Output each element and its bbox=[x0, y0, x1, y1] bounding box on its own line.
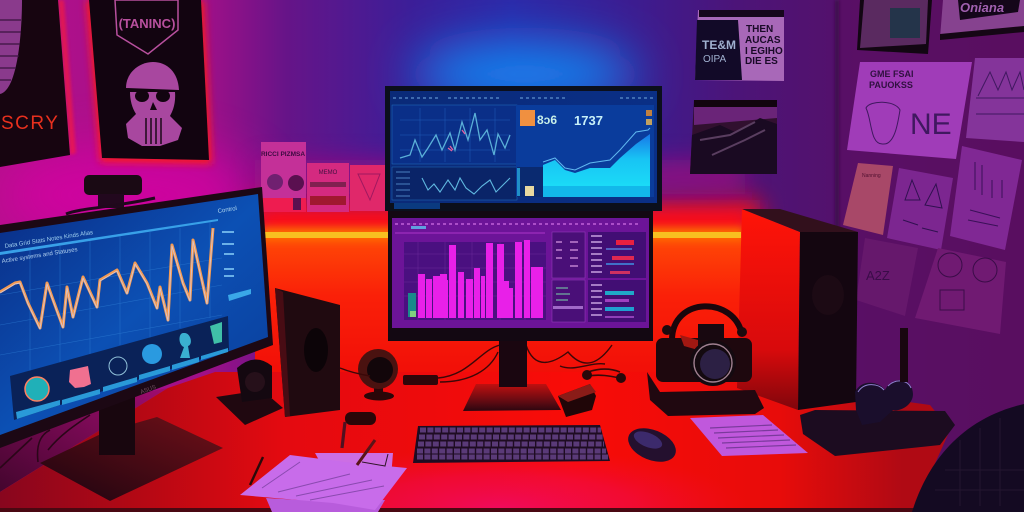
power brick bbox=[558, 384, 596, 417]
card: notes: MEMO bbox=[319, 170, 338, 176]
poster: team: OIPA bbox=[703, 54, 726, 65]
poster: team: I EGIHO bbox=[745, 46, 783, 57]
backlit wall below the light strip bbox=[255, 236, 745, 386]
sketch notes wall bbox=[843, 58, 1024, 334]
side panel: upper list bbox=[552, 232, 585, 278]
poster: team bbox=[695, 10, 784, 81]
webcam bbox=[66, 175, 155, 214]
tile row bbox=[10, 316, 229, 420]
office chair bbox=[912, 404, 1024, 512]
note: letters bbox=[856, 238, 918, 316]
bar chart bbox=[404, 240, 546, 320]
panel: lower left line chart bbox=[392, 167, 517, 200]
stat tile and numbers bbox=[520, 110, 652, 128]
small desk remote bbox=[345, 412, 376, 425]
keyboard bbox=[413, 425, 610, 463]
poster: skull with red backlight bbox=[86, 0, 212, 164]
stat tile and numbers: 8ↄ6 bbox=[537, 113, 557, 127]
camera stand base bbox=[647, 372, 764, 416]
poster: team: TE&M bbox=[702, 38, 736, 52]
round desk camera bbox=[358, 349, 398, 400]
LED light strip bbox=[262, 227, 744, 241]
central monitor stand bbox=[463, 338, 561, 411]
grid bbox=[0, 222, 222, 372]
microphone stand bbox=[900, 328, 908, 382]
note: letters: A2Z bbox=[866, 268, 890, 283]
mouse bbox=[623, 422, 681, 468]
left monitor stand bbox=[40, 395, 223, 501]
poster: team: DIE ES bbox=[745, 56, 778, 67]
cable box bbox=[403, 375, 438, 385]
taskbar bbox=[394, 203, 440, 209]
left monitor bbox=[0, 187, 273, 448]
toolbar line bbox=[0, 219, 218, 255]
note: chart sketch bbox=[950, 146, 1022, 250]
left monitor: Active systems and Statuses bbox=[1, 247, 78, 265]
banner poster bbox=[940, 0, 1024, 40]
left monitor: Control bbox=[217, 206, 237, 215]
bottom monitor bbox=[388, 211, 653, 341]
stat tile and numbers: 1737 bbox=[574, 113, 603, 128]
note: peaks bbox=[966, 58, 1024, 142]
card: sticker sheet: RICCI PIZMSA bbox=[261, 151, 305, 158]
note: large sketch: NE bbox=[910, 108, 952, 141]
side panel: teal bars list bbox=[588, 280, 646, 322]
small wall cards behind the monitors bbox=[261, 142, 386, 212]
poster: mountain bbox=[690, 100, 777, 174]
line chart bbox=[0, 228, 213, 329]
earbuds cable bbox=[582, 369, 626, 383]
camera with headphones bbox=[656, 306, 752, 386]
cables bbox=[340, 345, 612, 382]
banner poster: Oniana bbox=[960, 0, 1004, 15]
left speaker bbox=[275, 288, 340, 417]
cables under left monitor bbox=[0, 415, 90, 468]
emblem: hexagon badge: (TANINC) bbox=[119, 16, 175, 31]
note: bubbles bbox=[915, 248, 1006, 334]
note: figures bbox=[887, 168, 953, 250]
panel: upper left line chart bbox=[392, 105, 517, 164]
panel: area chart bbox=[516, 105, 654, 197]
right book and game controller bbox=[800, 380, 955, 456]
top monitor bbox=[385, 86, 662, 211]
emblem: helmet skull bbox=[126, 62, 182, 146]
pens bbox=[250, 422, 388, 485]
monitor brand label: ASUS bbox=[140, 385, 157, 396]
toolbar bbox=[395, 223, 640, 225]
small speaker on stand bbox=[216, 359, 283, 425]
side panel: lower list bbox=[552, 280, 585, 322]
note: orange sticky: Nanning bbox=[862, 173, 881, 179]
framed pictures top right bbox=[857, 0, 1024, 54]
emblem: hexagon badge bbox=[115, 0, 178, 54]
poster: SCRY: SCRY bbox=[1, 113, 59, 134]
poster: team: AUCAS bbox=[745, 35, 781, 46]
tile icons bbox=[25, 377, 49, 401]
paper stack bbox=[240, 453, 407, 512]
picture frame bbox=[857, 0, 932, 54]
note: large sketch: PAUOKSS bbox=[869, 80, 913, 90]
menu bar bbox=[393, 97, 655, 99]
sidebar bbox=[222, 231, 251, 301]
chart labels: Data Grid Stats Notes Kinds Alias bbox=[4, 230, 94, 250]
poster: team: THEN bbox=[746, 24, 773, 35]
side panel: red bars list bbox=[588, 232, 646, 278]
note: large sketch bbox=[847, 62, 972, 159]
tower speaker bbox=[737, 209, 858, 410]
note: orange sticky bbox=[843, 163, 893, 235]
poster: SCRY bbox=[0, 0, 76, 167]
desk surface bbox=[0, 372, 950, 512]
document on desk bbox=[690, 415, 808, 456]
note: large sketch: GME FSAI bbox=[870, 69, 914, 79]
wall wedge below left monitor bbox=[0, 388, 168, 492]
card: triangle bbox=[350, 165, 386, 211]
